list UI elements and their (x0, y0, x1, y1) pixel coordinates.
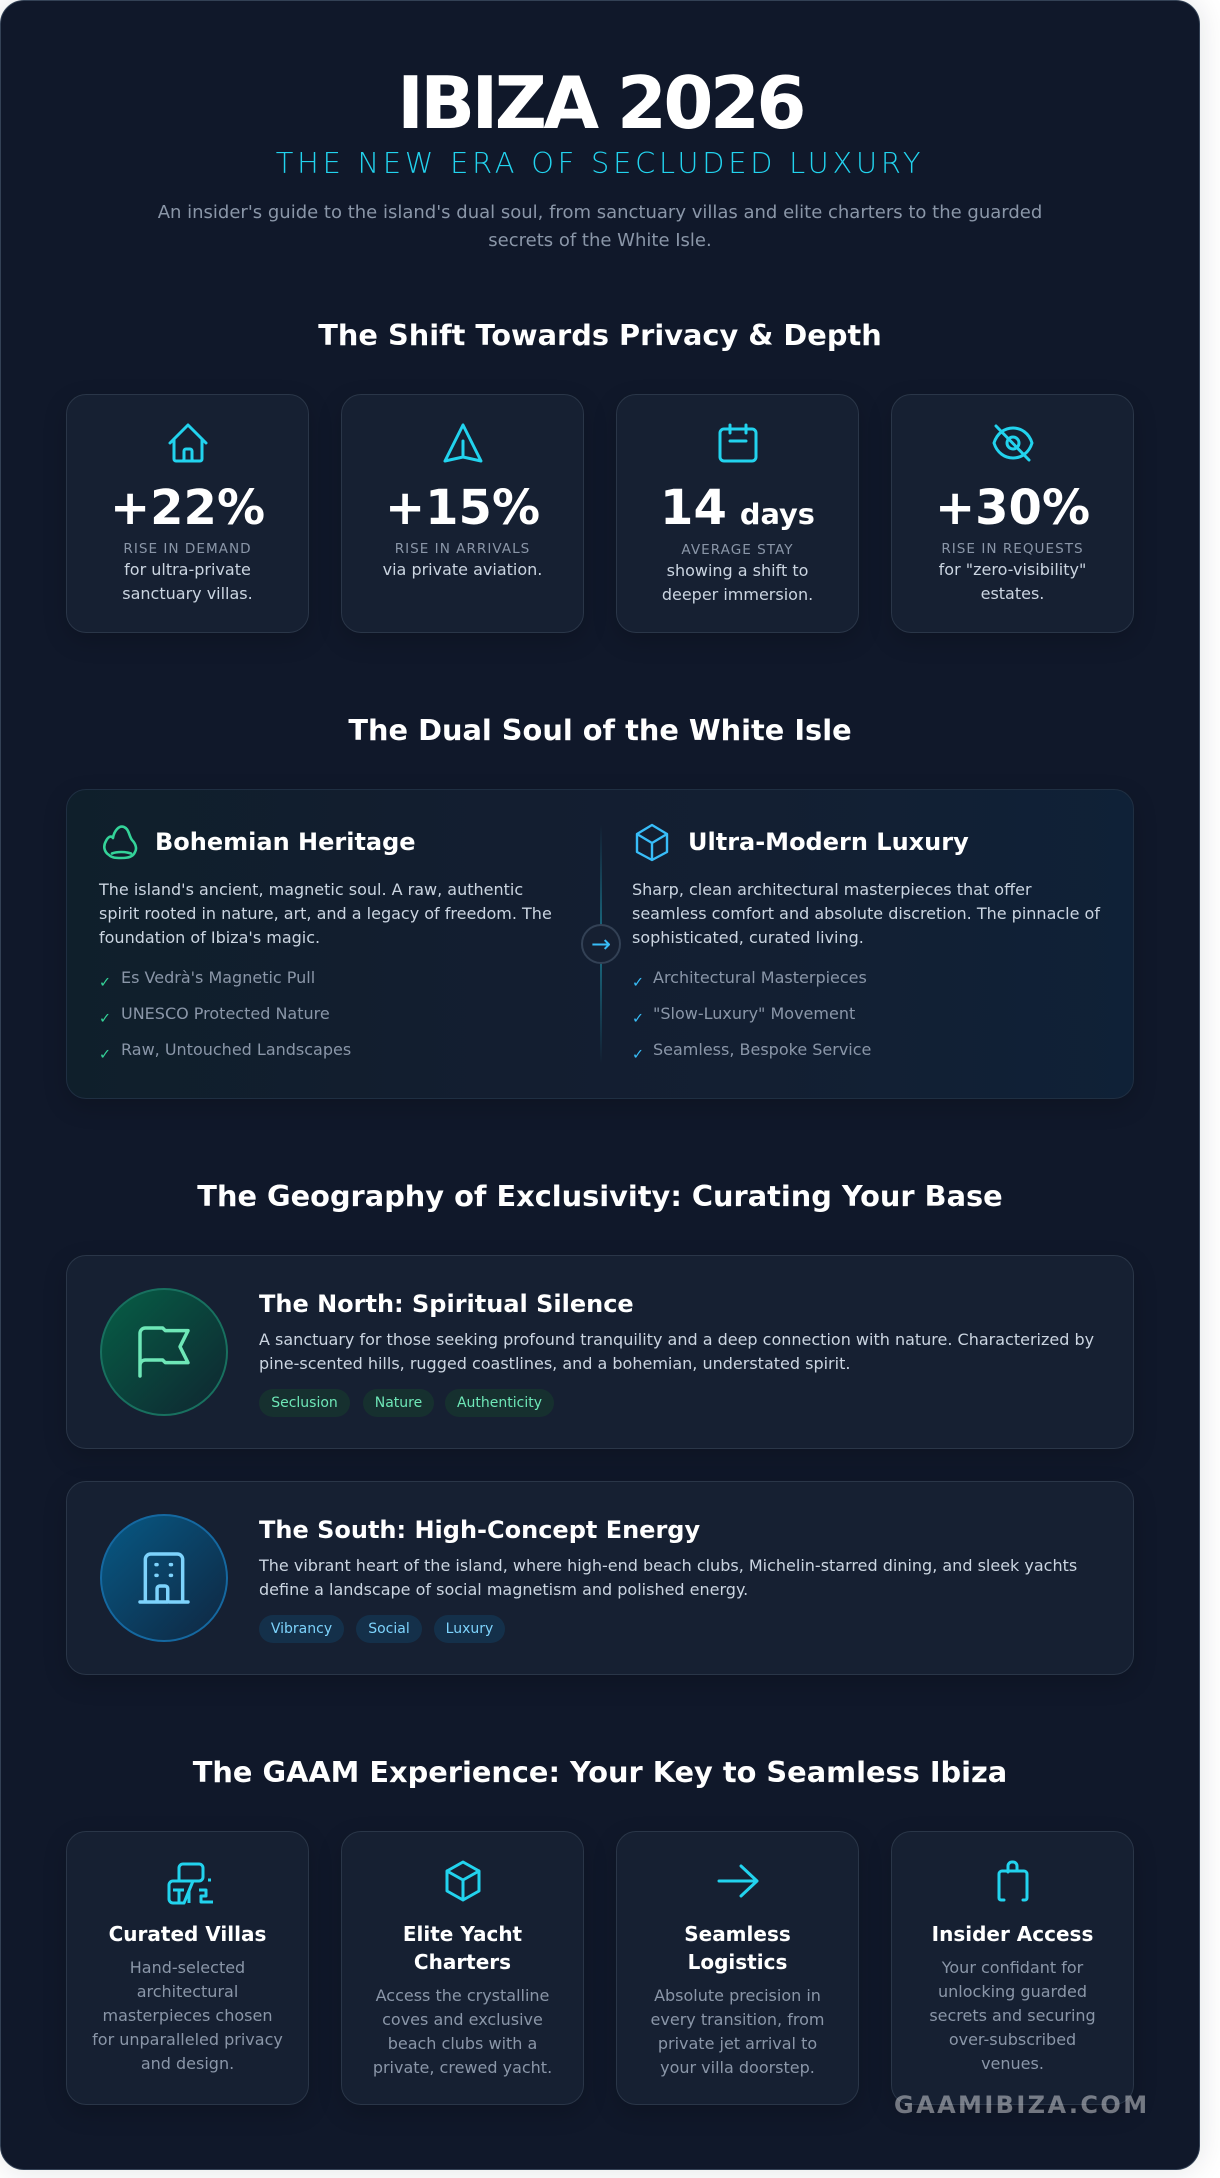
icon: arrow (718, 1864, 759, 1898)
intro text: An insider's guide to the island's dual soul, from sanctuary villas and elite charters to the guarded (158, 202, 1042, 223)
icon: luggage (998, 1860, 1028, 1902)
stat label: AVERAGE STAY (681, 542, 794, 558)
list: bohemian features (99, 968, 351, 1063)
description: architectural (137, 1982, 238, 2001)
description: over-subscribed (949, 2030, 1076, 2049)
description: your villa doorstep. (660, 2058, 815, 2077)
description (373, 1986, 552, 2077)
title: Insider Access (932, 1922, 1093, 1946)
list: luxury features: ✓ (632, 975, 644, 991)
panel: the north (66, 1255, 1134, 1449)
stat label: RISE IN REQUESTS (941, 541, 1084, 557)
tags: Nature (375, 1395, 422, 1411)
stat description: for "zero-visibility" (939, 560, 1086, 579)
tags: Seclusion (271, 1395, 338, 1411)
text: luxury description: sophisticated, curated living. (632, 928, 864, 947)
subtitle: THE NEW ERA OF SECLUDED LUXURY (276, 146, 924, 180)
list: luxury features (632, 968, 871, 1063)
heading: privacy and depth: The Shift Towards Privacy & Depth (318, 318, 882, 352)
description: secrets and securing (929, 2006, 1096, 2025)
text: bohemian description: spirit rooted in nature, art, and a legacy of freedom. The (99, 904, 552, 923)
title: Logistics (688, 1950, 787, 1974)
list: luxury features: ✓ (632, 1047, 644, 1063)
icon: navigation arrow (443, 423, 482, 462)
description: Hand-selected (130, 1958, 245, 1977)
tags: Authenticity (457, 1395, 542, 1411)
list: luxury features: "Slow-Luxury" Movement (653, 1004, 855, 1023)
description (929, 1958, 1096, 2073)
title: Curated Villas (109, 1922, 266, 1946)
description: Access the crystalline (376, 1986, 549, 2005)
service card: insider access (891, 1831, 1134, 2105)
list: bohemian features: Raw, Untouched Landscapes (121, 1040, 351, 1059)
stat description (122, 560, 253, 603)
description: The vibrant heart of the island, where high-end beach clubs, Michelin-starred dining, and sleek yachts (259, 1556, 1077, 1575)
description: define a landscape of social magnetism and polished energy. (259, 1580, 748, 1599)
list: luxury features: Seamless, Bespoke Service (653, 1040, 871, 1059)
title (684, 1922, 791, 1974)
description (651, 1986, 824, 2077)
tags: Social (368, 1621, 410, 1637)
title: IBIZA 2026 (397, 61, 803, 145)
icon: flag in green circle (100, 1288, 228, 1416)
description: private, crewed yacht. (373, 2058, 552, 2077)
stat description: deeper immersion. (662, 585, 813, 604)
watermark: GAAMIBIZA.COM (894, 2091, 1150, 2119)
title: The North: Spiritual Silence (259, 1290, 634, 1318)
title: The South: High-Concept Energy (259, 1516, 700, 1544)
stat description: estates. (981, 584, 1044, 603)
text: luxury description: seamless comfort and absolute discretion. The pinnacle of (632, 904, 1100, 923)
list: bohemian features: Es Vedrà's Magnetic Pull (121, 968, 315, 987)
heading: dual soul: The Dual Soul of the White Isle (348, 713, 852, 747)
icon: flame (103, 825, 138, 860)
list: luxury features: ✓ (632, 1011, 644, 1027)
stat value: +15% (385, 480, 540, 536)
text: luxury description: Sharp, clean architectural masterpieces that offer (632, 880, 1032, 899)
stat value: 14 days (660, 480, 815, 536)
description: for unparalleled privacy (92, 2030, 283, 2049)
description: and design. (141, 2054, 234, 2073)
stat description: for ultra-private (124, 560, 251, 579)
panel: dual soul comparison (66, 789, 1134, 1099)
icon: house (168, 423, 208, 462)
icon: cube (445, 1860, 480, 1902)
heading: GAAM experience: The GAAM Experience: Your Key to Seamless Ibiza (193, 1755, 1007, 1789)
service card: villas (66, 1831, 309, 2105)
title (403, 1922, 522, 1974)
stat card: requests (891, 394, 1134, 633)
stat description: sanctuary villas. (122, 584, 253, 603)
description (259, 1330, 1094, 1373)
list: bohemian features: ✓ (99, 975, 111, 991)
list: luxury features: Architectural Masterpieces (653, 968, 867, 987)
arrow badge: → (591, 930, 611, 958)
list: bohemian features: UNESCO Protected Nature (121, 1004, 330, 1023)
tags: Luxury (446, 1621, 493, 1637)
stat description: showing a shift to (667, 561, 808, 580)
service card: yachts (341, 1831, 584, 2105)
service card: logistics (616, 1831, 859, 2105)
description (92, 1958, 283, 2073)
text: bohemian description: The island's ancient, magnetic soul. A raw, authentic (99, 880, 523, 899)
stat label: RISE IN ARRIVALS (395, 541, 530, 557)
description: Absolute precision in (654, 1986, 821, 2005)
list: bohemian features: ✓ (99, 1047, 111, 1063)
description: beach clubs with a (388, 2034, 537, 2053)
description: pine-scented hills, rugged coastlines, and a bohemian, understated spirit. (259, 1354, 850, 1373)
intro text (158, 202, 1042, 251)
description: Your confidant for (942, 1958, 1083, 1977)
title: Elite Yacht (403, 1922, 522, 1946)
panel: the south (66, 1481, 1134, 1675)
heading: bohemian heritage: Bohemian Heritage (155, 828, 416, 856)
text: luxury description (632, 880, 1100, 947)
stat description: via private aviation. (383, 560, 542, 579)
description: private jet arrival to (658, 2034, 817, 2053)
description: venues. (981, 2054, 1044, 2073)
heading: geography: The Geography of Exclusivity: Curating Your Base (197, 1179, 1003, 1213)
description: every transition, from (651, 2010, 824, 2029)
title: Charters (414, 1950, 511, 1974)
icon: calendar (718, 424, 758, 462)
stat label: RISE IN DEMAND (123, 541, 252, 557)
stat value: +30% (935, 480, 1090, 536)
intro text: secrets of the White Isle. (488, 230, 712, 251)
stat value: +22% (110, 480, 265, 536)
text: bohemian description: foundation of Ibiza's magic. (99, 928, 320, 947)
stat card: demand (66, 394, 309, 633)
stat description (662, 561, 813, 604)
arrow badge (581, 924, 621, 964)
description: masterpieces chosen (102, 2006, 272, 2025)
description: A sanctuary for those seeking profound tranquility and a deep connection with nature. Characterized by (259, 1330, 1094, 1349)
icon: cube (636, 824, 668, 862)
icon: crossed eye (992, 424, 1034, 462)
title: Seamless (684, 1922, 791, 1946)
icon: villas (168, 1862, 213, 1904)
tags (259, 1389, 554, 1417)
description: unlocking guarded (938, 1982, 1087, 2001)
description: coves and exclusive (382, 2010, 543, 2029)
stat card: arrivals (341, 394, 584, 633)
description (258, 1556, 1077, 1599)
icon: building in blue circle (100, 1514, 228, 1642)
list: bohemian features: ✓ (99, 1011, 111, 1027)
tags: Vibrancy (271, 1621, 332, 1637)
heading: ultra-modern luxury: Ultra-Modern Luxury (688, 828, 969, 856)
stat description (939, 560, 1086, 603)
stat card: average stay (616, 394, 859, 633)
text: bohemian description (98, 880, 552, 947)
tags (259, 1615, 505, 1643)
